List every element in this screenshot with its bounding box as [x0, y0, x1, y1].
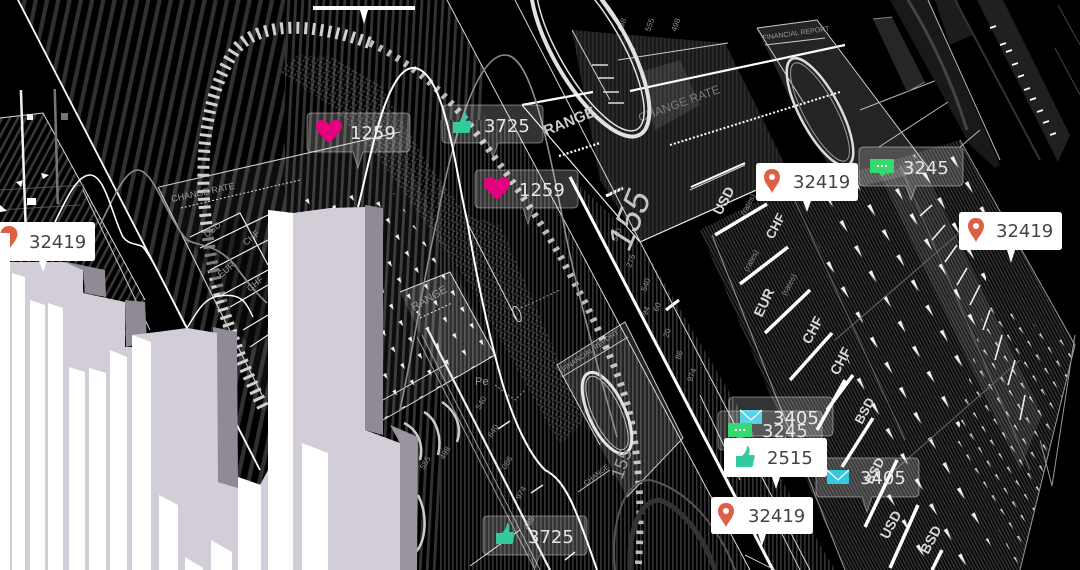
callout: envelope 3405 upper: [729, 397, 833, 448]
icon: green chat: [728, 423, 752, 441]
icon: thumbs up: [736, 446, 755, 467]
panel: ruler strip: 540: [610, 227, 624, 243]
table labels: USD: [710, 184, 738, 217]
dashed circular gauge: [203, 28, 640, 570]
panel: large USD table: [700, 140, 1075, 570]
front faces: [0, 207, 400, 570]
panel: main striped backdrop: [0, 0, 760, 570]
icon: thumbs up: [453, 112, 472, 133]
table labels: (rates): [742, 248, 761, 273]
panel: range header with 155: [522, 92, 790, 258]
callout: heart 1259 lower: [475, 170, 578, 224]
panel: financial report ring: FINANCIAL REPORT: [561, 329, 621, 374]
side faces: [65, 262, 106, 297]
ruler scale numbers: [417, 330, 575, 570]
white line curves: [55, 68, 597, 570]
ruler scale numbers: Pe: [475, 376, 488, 388]
panel: upper translucent rate chart: 555: [643, 17, 657, 33]
lower swirl: [614, 480, 735, 570]
table labels: (rates): [739, 192, 758, 217]
callout: envelope 3405 right: 3405: [860, 468, 906, 489]
half-circle dials: [404, 402, 459, 552]
panel: upper translucent rate chart: CHANGE RATE: [636, 82, 722, 125]
icon: location pin: [968, 218, 984, 242]
panel: ruler strip: 60: [651, 301, 663, 313]
big ring: [508, 0, 672, 153]
bar chart: front white column edge: [0, 233, 10, 570]
callout: pin 32419 far right: 32419: [996, 221, 1053, 242]
table labels: BSD: [851, 395, 878, 426]
thick table bars: [715, 204, 942, 570]
panel: range chart: RANGE: [410, 284, 449, 314]
callout: pin 32419 bottom: 32419: [748, 506, 805, 527]
table labels: CHF: [827, 344, 854, 377]
table labels: BSD: [917, 523, 945, 556]
panel: upper translucent rate chart: 498: [669, 17, 683, 33]
callout: thumb 2515: [724, 438, 827, 489]
ruler scale numbers: 498: [522, 514, 537, 531]
panels: far upper-right charts: [873, 0, 1080, 168]
callout: chat 3245 lower: 3245: [762, 421, 808, 442]
panel: technical report with ring: [757, 20, 950, 190]
panel: currency list: USD: [202, 219, 223, 240]
ruler scale numbers: 974: [514, 484, 529, 501]
label: range: RANGE: [541, 104, 598, 140]
callout: thumb 3725 lower: [483, 516, 587, 568]
table labels: CHF: [762, 211, 788, 241]
callout: chat 3245 lower: [718, 411, 822, 450]
callout: thumb 3725 upper: 3725: [484, 116, 530, 137]
callout: envelope 3405 right: [816, 458, 919, 512]
callout: pin 32419 upper right: 32419: [793, 172, 850, 193]
panel: ruler strip: 540: [639, 277, 653, 293]
table labels: CHF: [799, 313, 826, 346]
callout: heart 1259 upper: 1259: [350, 123, 396, 144]
callout: heart 1259 upper: [307, 113, 410, 168]
callout: pin 32419 upper right: [756, 163, 858, 212]
ruler scale numbers: 086: [500, 454, 515, 471]
table labels: USD: [877, 508, 905, 541]
panel: financial report ring: CHANGE: [583, 463, 611, 488]
thin diagonal frame lines: [18, 0, 810, 570]
ruler scale numbers: 540: [474, 394, 489, 411]
panel: currency list: CHF: [241, 228, 262, 248]
icon: location pin: [764, 169, 780, 193]
panel: upper translucent rate chart: [572, 0, 845, 242]
panel: ruler strip: 275: [624, 253, 638, 269]
panel: ruler strip: 94: [640, 305, 652, 317]
callout: thumb 2515: 2515: [767, 448, 813, 469]
top pointer bar: [313, 6, 415, 24]
half-circle dials: 498: [438, 444, 453, 461]
callout: pin 32419 bottom: [711, 497, 813, 546]
callout: pin 32419 far right: [959, 212, 1062, 263]
ruler scale numbers: 640: [486, 422, 501, 439]
icon: heart: [484, 177, 510, 200]
callout: chat 3245 upper: [859, 147, 963, 200]
panel: change rate chart: [158, 132, 495, 420]
white highlights: [12, 210, 328, 570]
panel: ruler strip: 974: [685, 367, 699, 383]
panel: range header with 155: 155: [600, 180, 658, 258]
icon: thumbs up: [496, 523, 515, 544]
callout: thumb 3725 upper: [442, 105, 543, 158]
table labels: BSD: [861, 455, 888, 486]
table labels: [710, 184, 945, 556]
panel: financial report ring: 155: [607, 446, 636, 481]
panel: technical report with ring: FINANCIAL REPORT: [762, 26, 831, 42]
callout: 32419 left: [0, 222, 95, 272]
panel: ruler strip: [570, 177, 835, 570]
table labels: EUR: [750, 286, 777, 319]
callout: envelope 3405 upper: 3405: [773, 408, 819, 429]
panel: currency list: CHF: [245, 274, 266, 294]
world map dotted band: [278, 55, 585, 445]
icon: green chat: [870, 159, 894, 177]
icon: envelope: [827, 470, 849, 484]
label: change rate: CHANGE RATE: [170, 181, 235, 204]
callout: thumb 3725 lower: 3725: [528, 527, 574, 548]
icon: location pin: [718, 503, 734, 527]
bar chart: 3D white columns: [0, 205, 418, 570]
half-circle dials: 555: [418, 454, 433, 471]
panel: financial report ring: [557, 322, 683, 497]
panel: currency list: EUR: [216, 259, 237, 280]
table labels: (rates): [780, 272, 799, 297]
panel: small left chart: [0, 89, 145, 340]
panel: ruler strip: 20: [661, 327, 673, 339]
icon: location pin: [0, 226, 18, 250]
callout: chat 3245 upper: 3245: [903, 158, 949, 179]
grey line curves: [100, 55, 617, 437]
icon: heart: [316, 120, 342, 143]
panel: currency list: [190, 213, 295, 350]
panel: range chart: [383, 272, 495, 420]
panel: upper translucent rate chart: 498: [615, 17, 629, 33]
icon: envelope: [740, 410, 762, 424]
panel: ruler strip: 86: [673, 349, 685, 361]
callout: heart 1259 lower: 1259: [519, 180, 565, 201]
value: 32419: [29, 232, 86, 253]
